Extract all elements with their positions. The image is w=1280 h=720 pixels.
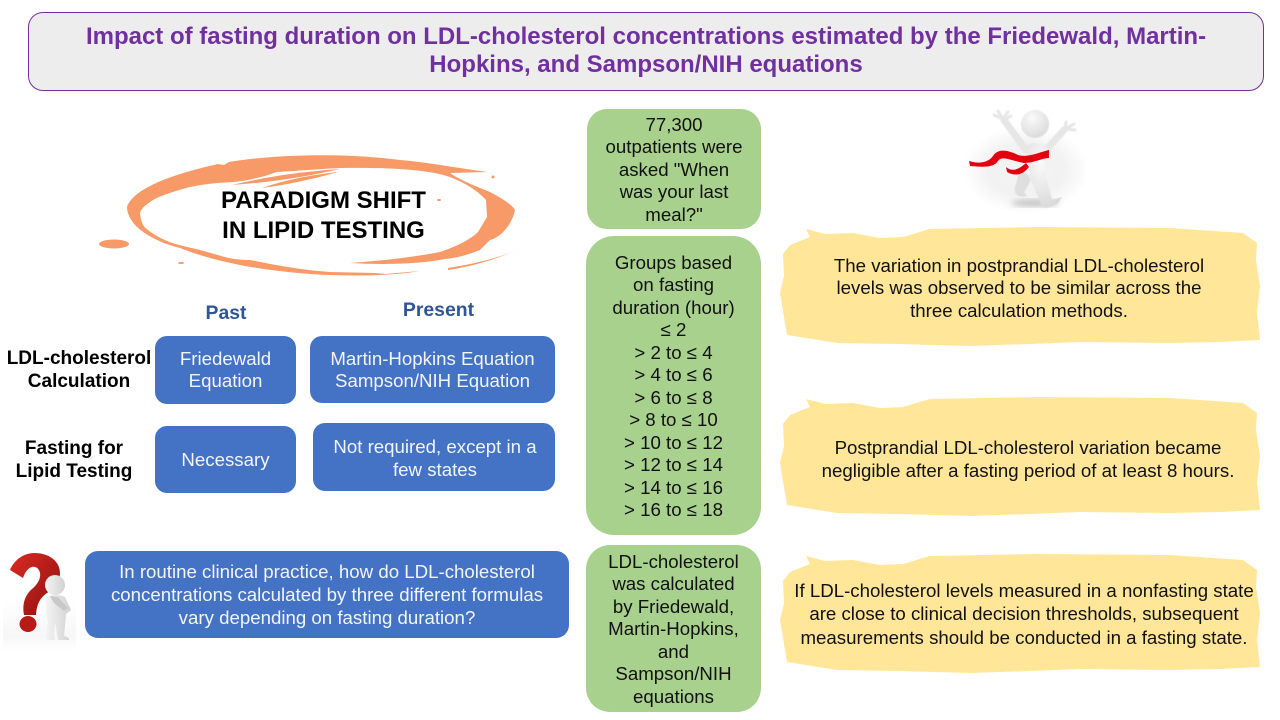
box: fasting duration groups: > 12 to ≤ 14	[624, 454, 723, 475]
icon: orange brush ring	[99, 155, 518, 276]
brush background	[780, 227, 1260, 346]
box: Friedewald equation: Equation	[189, 370, 262, 391]
icon: runner crossing finish ribbon	[969, 110, 1076, 208]
row label: fasting for lipid testing: Fasting for	[25, 438, 123, 459]
box: research question: vary depending on fasting duration?	[179, 607, 475, 628]
box: fasting duration groups: > 8 to ≤ 10	[629, 409, 718, 430]
box: equations used: and	[658, 641, 689, 662]
box: not required: Not required, except in a	[333, 436, 537, 457]
title text: Impact of fasting duration on LDL-cholesterol concentrations estimated by the Friedewald, Martin-	[86, 23, 1206, 50]
box: research question: concentrations calculated by three different formulas	[111, 584, 543, 605]
box: fasting duration groups: ≤ 2	[661, 319, 686, 340]
box: outpatients: was your last	[620, 181, 728, 202]
heading text	[221, 187, 426, 244]
box: Martin-Hopkins and Sampson equations: Martin-Hopkins Equation	[330, 348, 535, 369]
panel: paradigm shift heading with brush ring	[99, 155, 518, 276]
box: equations used: equations	[633, 686, 714, 707]
box: equations used: LDL-cholesterol	[608, 551, 739, 572]
callout: fasting recheck near thresholds: are close to clinical decision thresholds, subsequent	[809, 603, 1239, 624]
row label: fasting for lipid testing: Lipid Testing	[16, 461, 132, 482]
row label: LDL-cholesterol calculation	[7, 348, 151, 392]
box: necessary: Necessary	[181, 449, 270, 470]
heading text: PARADIGM SHIFT	[221, 187, 426, 214]
row label: fasting for lipid testing	[16, 438, 132, 482]
box: fasting duration groups: > 14 to ≤ 16	[624, 477, 723, 498]
box: outpatients: asked "When	[619, 159, 729, 180]
heading text: IN LIPID TESTING	[222, 217, 425, 244]
box: Martin-Hopkins and Sampson equations	[310, 336, 555, 403]
box: outpatients	[587, 109, 761, 229]
callout: negligible after 8 hours: negligible after a fasting period of at least 8 hours.	[822, 460, 1234, 481]
box: fasting duration groups: > 2 to ≤ 4	[634, 342, 713, 363]
callout: fasting recheck near thresholds: measurements should be conducted in a fasting state.	[800, 627, 1248, 648]
box: fasting duration groups	[586, 236, 761, 535]
box: Martin-Hopkins and Sampson equations: Sampson/NIH Equation	[335, 370, 530, 391]
box: fasting duration groups: on fasting	[633, 274, 714, 295]
callout: similar variation across methods	[780, 227, 1260, 346]
box: necessary	[155, 426, 296, 493]
box: equations used: Sampson/NIH	[615, 663, 732, 684]
box: research question: In routine clinical practice, how do LDL-cholesterol	[119, 561, 535, 582]
box: Friedewald equation	[155, 336, 296, 404]
box: fasting duration groups: > 4 to ≤ 6	[634, 364, 713, 385]
box: outpatients: 77,300	[645, 114, 703, 135]
callout: fasting recheck near thresholds	[780, 554, 1260, 673]
title text	[86, 23, 1206, 78]
icon: person with question mark	[10, 553, 71, 640]
callout: similar variation across methods: levels was observed to be similar across the	[836, 277, 1202, 298]
brush background	[780, 554, 1260, 673]
row label: LDL-cholesterol calculation: LDL-cholesterol	[7, 348, 151, 369]
box: equations used	[586, 545, 761, 712]
callout: similar variation across methods: The variation in postprandial LDL-cholesterol	[834, 255, 1204, 276]
callout: negligible after 8 hours	[780, 397, 1260, 516]
callout: similar variation across methods: three calculation methods.	[910, 300, 1128, 321]
column header: Present: Present	[403, 299, 474, 321]
column header: Past: Past	[206, 302, 246, 324]
box: Friedewald equation: Friedewald	[180, 348, 271, 369]
box: fasting duration groups: > 10 to ≤ 12	[624, 432, 723, 453]
box: equations used: Martin-Hopkins,	[608, 618, 739, 639]
callout: negligible after 8 hours: Postprandial LDL-cholesterol variation became	[835, 437, 1221, 458]
row label: LDL-cholesterol calculation: Calculation	[28, 371, 130, 392]
box: outpatients: meal?"	[645, 204, 703, 225]
box: outpatients: outpatients were	[606, 136, 742, 157]
box: fasting duration groups: > 16 to ≤ 18	[624, 499, 723, 520]
box: fasting duration groups: duration (hour)	[612, 297, 735, 318]
box: equations used: was calculated	[612, 573, 735, 594]
box: not required	[313, 423, 555, 491]
brush background	[780, 397, 1260, 516]
callout: fasting recheck near thresholds: If LDL-cholesterol levels measured in a nonfasting state	[794, 580, 1254, 601]
box: not required: few states	[393, 459, 477, 480]
box: fasting duration groups: > 6 to ≤ 8	[634, 387, 713, 408]
title banner	[28, 12, 1264, 91]
title text: Hopkins, and Sampson/NIH equations	[429, 51, 863, 78]
box: equations used: by Friedewald,	[613, 596, 734, 617]
box: research question	[85, 551, 569, 638]
box: fasting duration groups: Groups based	[615, 252, 732, 273]
